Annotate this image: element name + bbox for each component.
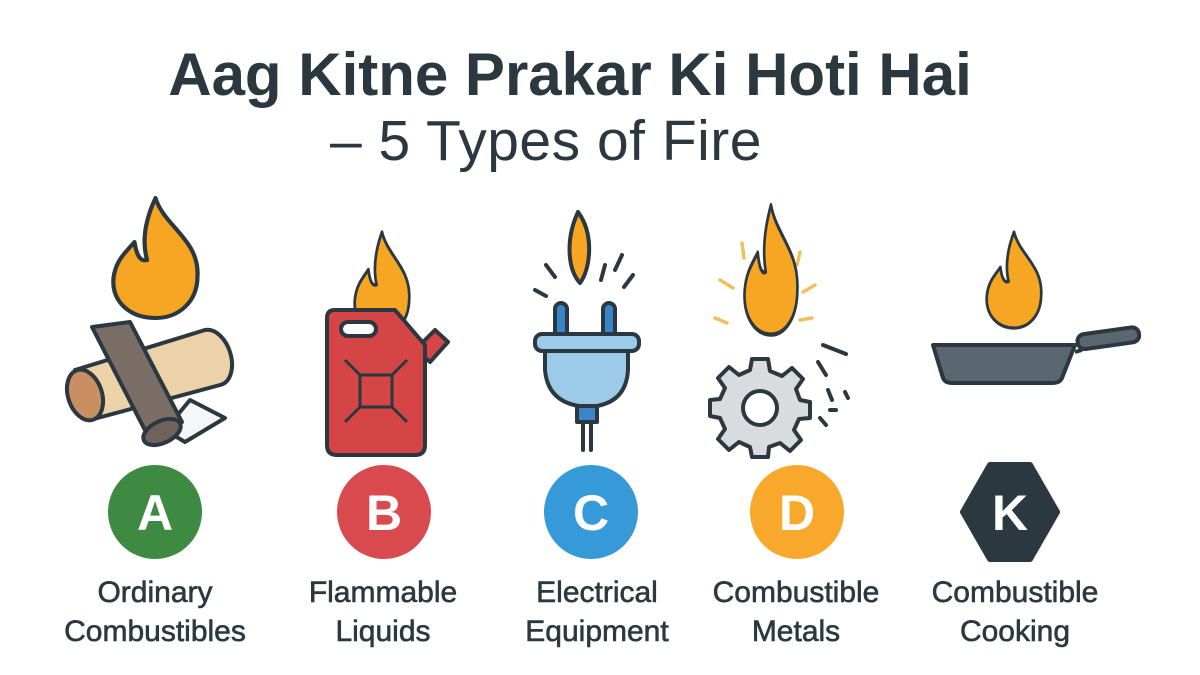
badge A bbox=[108, 465, 202, 559]
icon: class C plug bbox=[535, 212, 639, 450]
label K: Combustible bbox=[932, 576, 1098, 609]
label D bbox=[713, 576, 879, 648]
badge D bbox=[750, 465, 844, 559]
flame A bbox=[113, 198, 198, 318]
badge B: B bbox=[366, 485, 402, 541]
label B bbox=[309, 576, 457, 648]
label B: Liquids bbox=[335, 615, 431, 648]
icon: class D metal gear bbox=[710, 205, 848, 457]
label C: Equipment bbox=[525, 615, 669, 648]
label B: Flammable bbox=[309, 576, 457, 609]
badge B bbox=[337, 465, 431, 559]
icon: class A wood fire bbox=[61, 198, 232, 450]
label A bbox=[64, 576, 246, 648]
subtitle: – 5 Types of Fire bbox=[330, 109, 762, 173]
label D: Metals bbox=[752, 615, 840, 648]
label A: Combustibles bbox=[64, 615, 246, 648]
badge C: C bbox=[573, 485, 609, 541]
label D: Combustible bbox=[713, 576, 879, 609]
label C: Electrical bbox=[536, 576, 658, 609]
icon: class K frying pan bbox=[933, 232, 1140, 383]
label A: Ordinary bbox=[97, 576, 213, 609]
icon: class B jerrycan bbox=[327, 232, 448, 455]
badge A: A bbox=[137, 485, 173, 541]
badge D: D bbox=[779, 485, 815, 541]
label K bbox=[932, 576, 1098, 648]
title: Aag Kitne Prakar Ki Hoti Hai bbox=[168, 41, 972, 108]
label C bbox=[525, 576, 669, 648]
badge C bbox=[544, 465, 638, 559]
badge K: K bbox=[992, 485, 1028, 541]
label K: Cooking bbox=[960, 615, 1070, 648]
badge K bbox=[963, 465, 1057, 559]
